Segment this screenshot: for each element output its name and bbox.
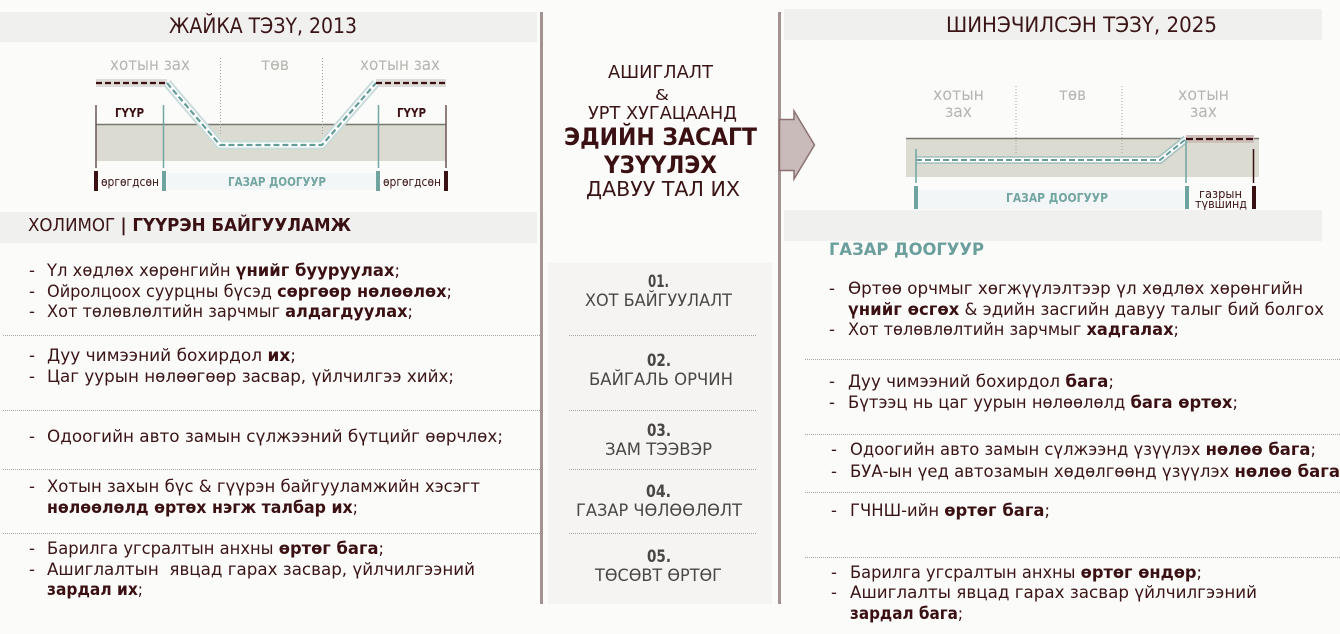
criterion 05: [594, 547, 722, 585]
text block: urban development: -: [29, 282, 35, 301]
panel: centre heading: АШИГЛАЛТ: [608, 63, 713, 83]
panel: centre heading: &: [655, 86, 669, 104]
text block: environment: Цаг уурын нөлөөгөөр засвар, үйлчилгээ хийх;: [47, 367, 454, 386]
heading: underground band: [784, 210, 1322, 260]
text block: urban development: [829, 279, 1324, 339]
chart: 2025 cross-section diagram: газрын: [1199, 187, 1242, 201]
text block: urban development: -: [29, 302, 35, 321]
text block: urban development: Ойролцоох суурцны бүсэд сөргөөр нөлөөлөх;: [47, 282, 452, 301]
heading: mixed bridge structure: [0, 212, 537, 243]
text block: urban development: үнийг өсгөх & эдийн засгийн давуу талыг бий болгох: [848, 300, 1324, 319]
panel: left column, 2013 design: [0, 12, 540, 599]
chart: 2025 cross-section diagram: зах: [1190, 102, 1217, 121]
text block: environment: [29, 346, 454, 386]
text block: transport: Одоогийн авто замын сүлжээнд үзүүлэх нөлөө бага;: [850, 440, 1316, 459]
criterion 05: ТӨСӨВТ ӨРТӨГ: [594, 566, 722, 585]
text block: budget: Барилга угсралтын анхны өртөг бага;: [47, 539, 384, 558]
chart: 2025 cross-section diagram: зах: [945, 102, 972, 121]
criterion 03: 03.: [647, 421, 671, 440]
text block: land acquisition: [29, 477, 480, 517]
text block: budget: -: [831, 583, 837, 602]
chart: 2013 cross-section diagram: хотын зах: [360, 55, 440, 74]
chart: 2013 cross-section diagram: ГҮҮР: [397, 106, 426, 120]
arrow: transition to updated design: [780, 111, 814, 179]
text block: urban development: -: [829, 279, 835, 298]
heading: mixed bridge structure: ХОЛИМОГ | ГҮҮРЭН БАЙГУУЛАМЖ: [28, 214, 352, 236]
chart: 2025 cross-section diagram: [906, 85, 1259, 211]
text block: land acquisition: -: [831, 501, 837, 520]
divider: left vertical rule: [540, 12, 543, 604]
criterion 01: ХОТ БАЙГУУЛАЛТ: [585, 291, 733, 310]
criterion 04: 04.: [646, 482, 671, 501]
criterion 05: 05.: [647, 547, 671, 566]
panel: centre heading: ДАВУУ ТАЛ ИХ: [586, 177, 740, 201]
heading: right title: ШИНЭЧИЛСЭН ТЭЗҮ, 2025: [946, 13, 1217, 37]
text block: budget: -: [29, 539, 35, 558]
text block: land acquisition: ГЧНШ-ийн өртөг бага;: [850, 501, 1050, 520]
text block: environment: Дуу чимээний бохирдол бага;: [848, 372, 1114, 391]
chart: 2013 cross-section diagram: төв: [261, 55, 289, 74]
chart: 2025 cross-section diagram: хотын: [933, 85, 984, 104]
criterion 03: ЗАМ ТЭЭВЭР: [605, 440, 712, 459]
divider: right vertical rule: [778, 12, 781, 604]
criterion 04: ГАЗАР ЧӨЛӨӨЛӨЛТ: [576, 501, 743, 520]
chart: 2013 cross-section diagram: хотын зах: [110, 55, 190, 74]
chart: 2025 cross-section diagram: ГАЗАР ДООГУУР: [1006, 191, 1108, 205]
heading: right title: [784, 9, 1322, 40]
text block: land acquisition: -: [29, 477, 35, 496]
text block: land acquisition: Хотын захын бүс & гүүрэн байгууламжийн хэсэгт: [47, 477, 480, 496]
criterion 02: БАЙГАЛЬ ОРЧИН: [589, 370, 733, 389]
criterion 03: [605, 421, 712, 459]
chart: 2013 cross-section diagram: өргөгдсөн: [383, 175, 441, 189]
chart: 2013 cross-section diagram: [94, 55, 448, 191]
text block: urban development: Үл хөдлөх хөрөнгийн үнийг бууруулах;: [46, 261, 400, 280]
text block: environment: [829, 372, 1238, 412]
text block: budget: [831, 563, 1257, 623]
text block: transport: -: [29, 427, 35, 446]
text block: urban development: Өртөө орчмыг хөгжүүлэлтээр үл хөдлөх хөрөнгийн: [848, 279, 1303, 298]
criterion 02: [589, 351, 733, 389]
criterion 01: [585, 272, 733, 310]
panel: right column, 2025 design: [784, 9, 1340, 623]
text block: budget: -: [831, 563, 837, 582]
text block: transport: -: [831, 462, 837, 481]
text block: budget: Барилга угсралтын анхны өртөг өндөр;: [850, 563, 1202, 582]
text block: transport: -: [831, 440, 837, 459]
text block: budget: -: [29, 560, 35, 579]
text block: environment: -: [29, 367, 35, 386]
panel: centre heading: ҮЗҮҮЛЭХ: [603, 151, 717, 179]
text block: urban development: Хот төлөвлөлтийн зарчмыг алдагдуулах;: [47, 302, 413, 321]
panel: centre heading: ЭДИЙН ЗАСАГТ: [564, 122, 758, 151]
text block: environment: Бүтээц нь цаг уурын нөлөөлөлд бага өртөх;: [848, 393, 1238, 412]
chart: 2013 cross-section diagram: ГҮҮР: [115, 106, 144, 120]
heading: underground band: ГАЗАР ДООГУУР: [829, 240, 984, 260]
text block: environment: -: [29, 346, 35, 365]
text block: urban development: Хот төлөвлөлтийн зарчмыг хадгалах;: [848, 320, 1179, 339]
text block: environment: Дуу чимээний бохирдол их;: [47, 346, 296, 365]
text block: environment: -: [829, 372, 835, 391]
text block: budget: [29, 539, 475, 599]
text block: budget: Ашиглалтын явцад гарах засвар, үйлчилгээний: [47, 560, 475, 579]
criterion 02: 02.: [647, 351, 671, 370]
criterion 01: 01.: [648, 272, 669, 291]
text block: urban development: -: [829, 320, 835, 339]
text block: budget: зардал бага;: [850, 604, 963, 623]
heading: left title: [0, 12, 537, 42]
text block: budget: Ашиглалты явцад гарах засвар үйлчилгээний: [850, 583, 1257, 602]
panel: centre criteria list: [548, 263, 772, 604]
text block: urban development: -: [29, 261, 35, 280]
chart: 2013 cross-section diagram: өргөгдсөн: [101, 175, 159, 189]
panel: centre heading: [564, 63, 758, 201]
text block: budget: зардал их;: [47, 580, 143, 599]
text block: transport: БУА-ын үед автозамын хөдөлгөөнд үзүүлэх нөлөө бага: [850, 462, 1340, 481]
text block: transport: [831, 440, 1340, 481]
chart: 2025 cross-section diagram: хотын: [1178, 85, 1229, 104]
text block: transport: Одоогийн авто замын сүлжээний бүтцийг өөрчлөх;: [47, 427, 503, 446]
text block: land acquisition: нөлөөлөлд өртөх нэгж талбар их;: [47, 498, 358, 517]
text block: environment: -: [829, 393, 835, 412]
criterion 04: [576, 482, 743, 520]
chart: 2013 cross-section diagram: ГАЗАР ДООГУУР: [228, 175, 326, 189]
heading: left title: ЖАЙКА ТЭЗҮ, 2013: [169, 13, 357, 38]
chart: 2025 cross-section diagram: төв: [1059, 85, 1086, 104]
text block: urban development: [29, 261, 452, 321]
chart: 2025 cross-section diagram: түвшинд: [1195, 197, 1247, 211]
panel: centre heading: УРТ ХУГАЦААНД: [588, 104, 737, 124]
